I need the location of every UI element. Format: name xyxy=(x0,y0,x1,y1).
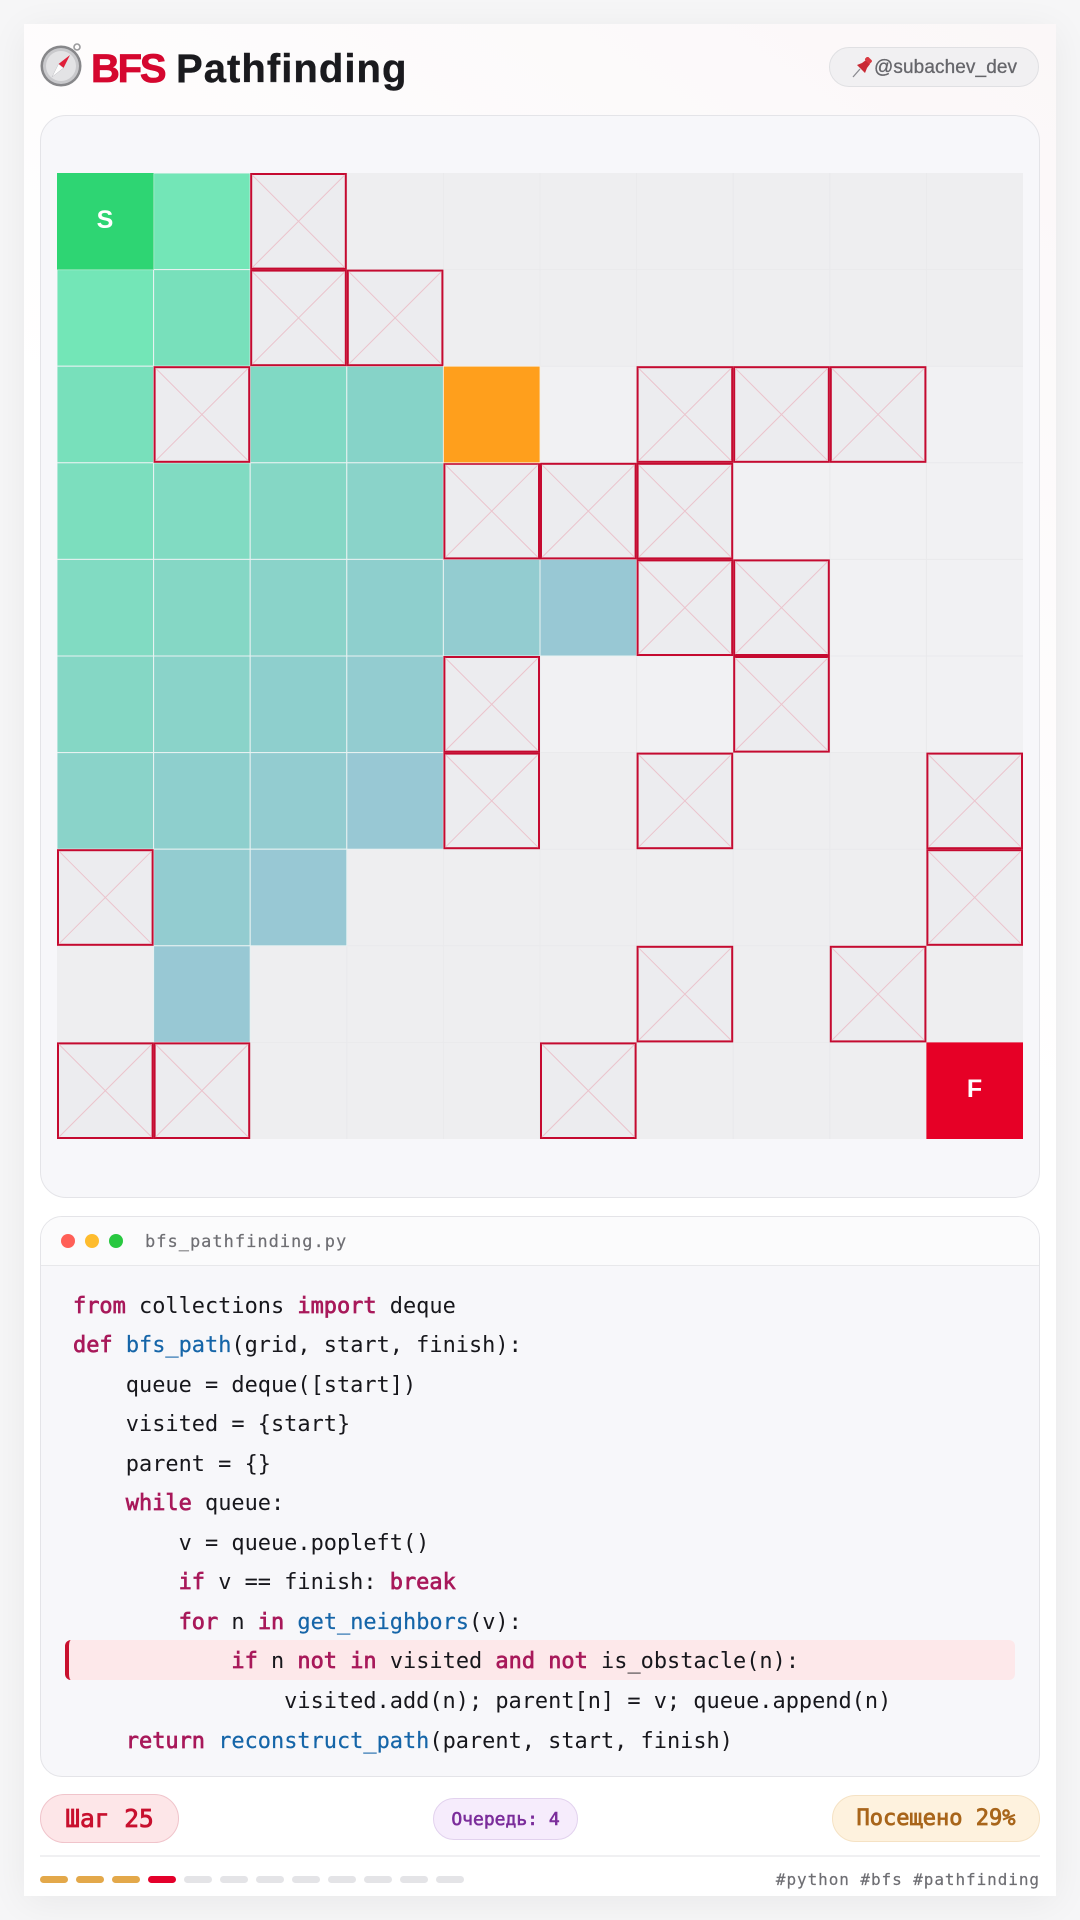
start cell: S xyxy=(97,206,113,234)
title: Pathfinding xyxy=(176,47,408,91)
code listing xyxy=(73,1294,891,1754)
icon: compass xyxy=(40,43,82,86)
header xyxy=(40,43,1039,91)
code listing: v = queue.popleft() xyxy=(179,1531,429,1556)
panel: code window xyxy=(40,1216,1040,1777)
start cell xyxy=(57,173,154,270)
current cell xyxy=(443,366,540,463)
highlighted code line background xyxy=(65,1640,1015,1680)
step badge xyxy=(40,1794,179,1843)
author badge xyxy=(829,47,1039,87)
hashtags: #python #bfs #pathfinding xyxy=(776,1870,1040,1889)
code listing: while queue: xyxy=(126,1491,284,1516)
visited cells xyxy=(57,173,637,1042)
progress dashes xyxy=(40,1876,464,1883)
code listing: return reconstruct_path(parent, start, finish) xyxy=(126,1729,733,1754)
obstacle cells xyxy=(58,174,1022,1138)
finish cell: F xyxy=(967,1075,982,1103)
window dot yellow xyxy=(85,1234,99,1248)
code listing: if v == finish: break xyxy=(179,1570,456,1595)
window dot red xyxy=(61,1234,75,1248)
window dot green xyxy=(109,1234,123,1248)
visited badge xyxy=(832,1795,1040,1842)
code window title bar xyxy=(41,1217,1039,1266)
code listing: queue = deque([start]) xyxy=(126,1373,416,1398)
visited badge: Посещено 29% xyxy=(857,1806,1015,1831)
code listing: def bfs_path(grid, start, finish): xyxy=(73,1333,522,1358)
file name: bfs_pathfinding.py xyxy=(145,1232,347,1252)
code listing: from collections import deque xyxy=(73,1294,456,1318)
code listing: if n not in visited and not is_obstacle(n): xyxy=(231,1649,799,1674)
queue badge: Очередь: 4 xyxy=(451,1808,560,1830)
footer divider xyxy=(40,1855,1040,1857)
icon: pushpin xyxy=(852,57,872,78)
code listing: visited = {start} xyxy=(126,1412,350,1437)
step badge: Шаг 25 xyxy=(65,1804,154,1833)
code listing: visited.add(n); parent[n] = v; queue.append(n) xyxy=(284,1689,891,1714)
code listing: parent = {} xyxy=(126,1452,271,1477)
author handle: @subachev_dev xyxy=(874,57,1017,78)
code listing: for n in get_neighbors(v): xyxy=(179,1610,522,1635)
finish cell xyxy=(926,1042,1023,1139)
title: BFS xyxy=(91,47,164,91)
queue badge xyxy=(433,1798,578,1840)
unvisited cells xyxy=(57,173,1023,1139)
grid chart xyxy=(57,173,1023,1139)
panel: pathfinding grid xyxy=(40,115,1040,1198)
